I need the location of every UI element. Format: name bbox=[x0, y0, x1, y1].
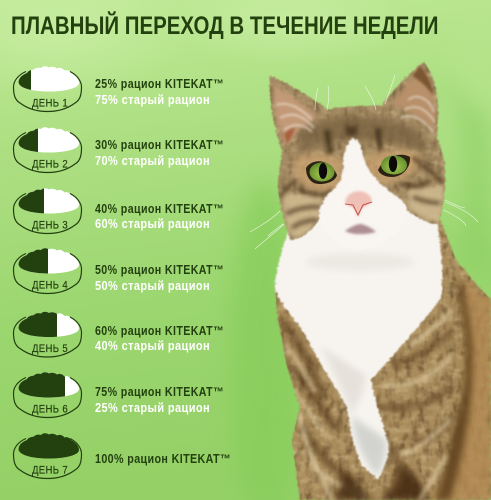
text: day 7 ratio: 100% рацион KITEKAT™ bbox=[95, 452, 231, 466]
text: day 1 ratio: 75% старый рацион bbox=[95, 93, 210, 107]
cat head bbox=[268, 61, 447, 241]
text: day 5 ratio: 60% рацион KITEKAT™ bbox=[95, 324, 224, 338]
cat chest bbox=[275, 205, 442, 480]
text: day 5 ratio bbox=[95, 324, 224, 353]
text: day 2 ratio: 30% рацион KITEKAT™ bbox=[95, 138, 224, 152]
illustration: tabby cat bbox=[250, 55, 491, 500]
cat shadow bbox=[430, 70, 491, 285]
icon: bowl day 3 bbox=[14, 188, 82, 234]
day 3 row bbox=[14, 188, 224, 234]
icon: bowl day 5 bbox=[14, 312, 82, 357]
text: day 3 ratio: 60% старый рацион bbox=[95, 217, 210, 231]
text: day 1 ratio bbox=[95, 77, 224, 107]
left ear interior bbox=[274, 84, 318, 146]
forehead markings bbox=[298, 116, 426, 156]
text: day 6 ratio bbox=[95, 385, 224, 415]
eye left bbox=[306, 161, 337, 184]
icon: bowl day 6 bbox=[14, 372, 82, 418]
icon: bowl day 1: ДЕНЬ 1 bbox=[32, 98, 68, 110]
chest shading bbox=[305, 253, 415, 476]
text: day 1 ratio: 25% рацион KITEKAT™ bbox=[95, 77, 224, 91]
text: day 6 ratio: 25% старый рацион bbox=[95, 401, 210, 415]
day 7 row bbox=[14, 433, 231, 478]
text: day 4 ratio: 50% рацион KITEKAT™ bbox=[95, 263, 224, 277]
day 4 row bbox=[14, 248, 224, 294]
text: day 4 ratio bbox=[95, 263, 224, 293]
icon: bowl day 4 bbox=[14, 248, 82, 294]
icon: bowl day 7: ДЕНЬ 7 bbox=[32, 464, 68, 476]
text: day 2 ratio: 70% старый рацион bbox=[95, 154, 210, 168]
mouth bbox=[345, 224, 376, 234]
day 5 row bbox=[14, 312, 224, 357]
cheek stripes bbox=[280, 158, 443, 228]
eye right bbox=[378, 155, 410, 177]
whiskers bbox=[250, 75, 478, 249]
icon: bowl day 5: ДЕНЬ 5 bbox=[32, 343, 68, 355]
lower cheeks bbox=[283, 185, 444, 238]
day 6 row bbox=[14, 372, 224, 418]
icon: bowl day 2: ДЕНЬ 2 bbox=[32, 158, 68, 170]
text: day 4 ratio: 50% старый рацион bbox=[95, 279, 210, 293]
warm patches around eyes bbox=[294, 154, 343, 192]
icon: bowl day 7 bbox=[14, 433, 82, 478]
icon: bowl day 4: ДЕНЬ 4 bbox=[32, 280, 68, 292]
text: day 3 ratio: 40% рацион KITEKAT™ bbox=[95, 202, 224, 216]
text: day 2 ratio bbox=[95, 138, 224, 168]
icon: bowl day 6: ДЕНЬ 6 bbox=[32, 404, 68, 416]
icon: bowl day 3: ДЕНЬ 3 bbox=[32, 220, 68, 232]
white blaze and muzzle bbox=[319, 139, 407, 250]
text: day 6 ratio: 75% рацион KITEKAT™ bbox=[95, 385, 224, 399]
right ear interior bbox=[393, 78, 437, 128]
icon: bowl day 1 bbox=[14, 66, 82, 112]
text: day 3 ratio bbox=[95, 202, 224, 231]
icon: bowl day 2 bbox=[14, 127, 82, 172]
ear hairs bbox=[276, 97, 435, 132]
day 2 row bbox=[14, 127, 224, 172]
day 1 row bbox=[14, 66, 224, 112]
cat body bbox=[262, 220, 491, 500]
text: day 5 ratio: 40% старый рацион bbox=[95, 339, 210, 353]
nose bbox=[345, 191, 372, 217]
